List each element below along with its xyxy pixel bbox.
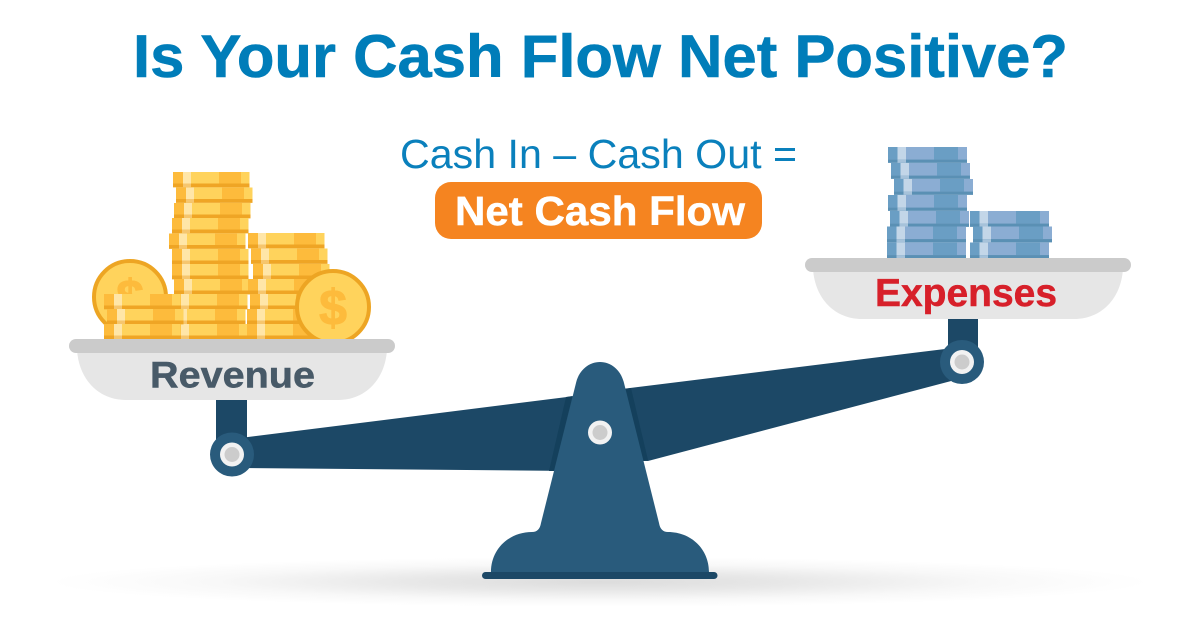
scale beam — [240, 349, 955, 471]
right coin: $ — [319, 280, 347, 336]
title: Is Your Cash Flow Net Positive? — [133, 23, 1068, 90]
coin stack: tall centre — [169, 172, 252, 339]
cash stack: short — [970, 211, 1052, 258]
left coin — [94, 261, 166, 333]
left pan post — [216, 398, 247, 448]
right pivot — [940, 340, 984, 384]
coin stack: lower left — [104, 294, 184, 339]
revenue label: Revenue — [150, 354, 315, 396]
expenses pan — [805, 258, 1131, 319]
ground shadow — [50, 557, 1150, 607]
fulcrum stand — [482, 362, 718, 579]
expenses label: Expenses — [875, 272, 1057, 315]
callout: net cash flow: Net Cash Flow — [455, 188, 745, 234]
right coin — [297, 271, 369, 343]
left pivot — [210, 432, 254, 476]
callout: net cash flow — [435, 182, 762, 239]
formula text: Cash In – Cash Out = — [400, 131, 797, 177]
cash stack: tall — [887, 147, 973, 258]
coin stack: right — [247, 233, 330, 339]
revenue pan — [69, 339, 395, 400]
right pan post — [948, 317, 978, 365]
left coin: $ — [116, 270, 144, 326]
